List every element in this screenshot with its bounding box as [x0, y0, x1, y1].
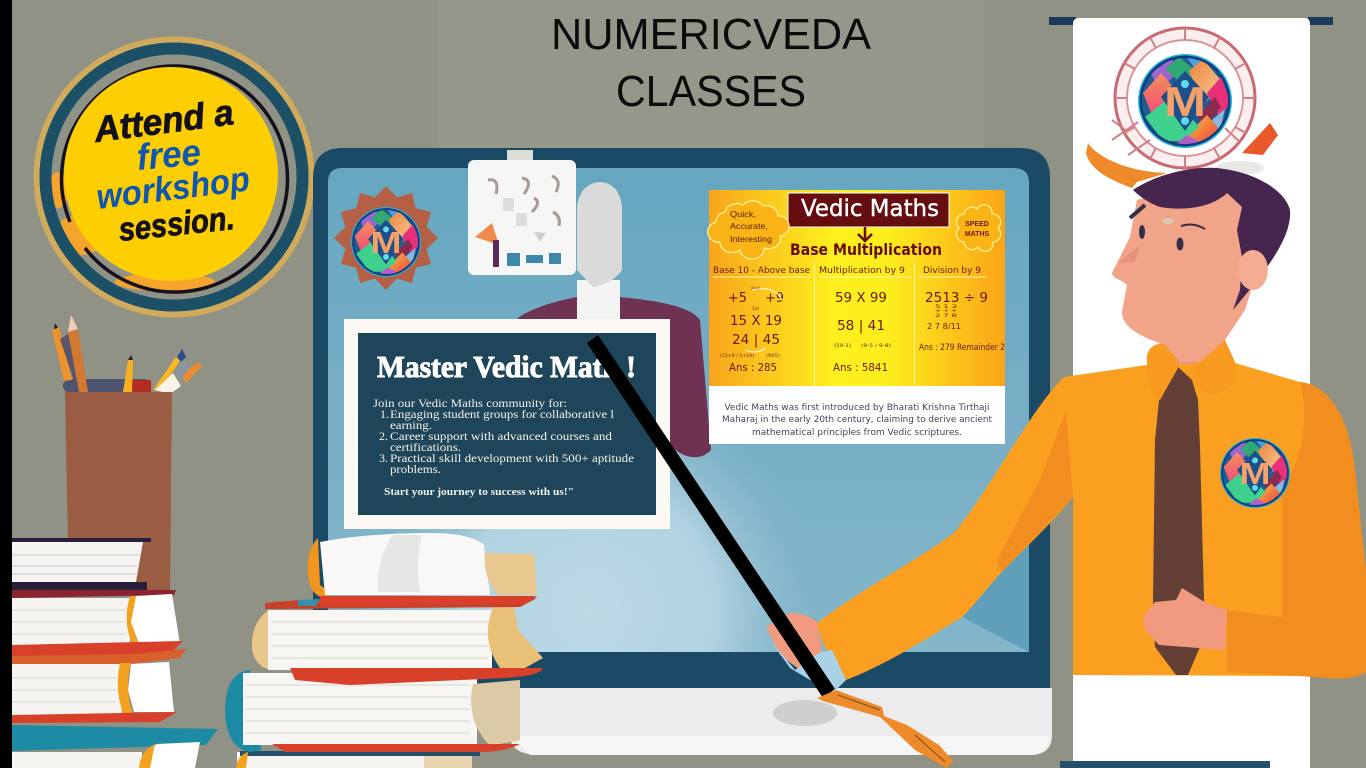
- card caption: Maharaj in the early 20th century, claiming to derive ancient: [722, 415, 992, 425]
- book 2: [252, 598, 543, 685]
- column 3 maths: 2 7 8/11: [927, 322, 961, 331]
- panel body text: 3.: [379, 451, 388, 465]
- icon: sketches: [488, 176, 559, 226]
- column 1 maths: 2nd: [751, 286, 760, 292]
- panel body text: earning.: [390, 418, 432, 432]
- panel heading: Master Vedic Math !: [377, 349, 636, 384]
- column 3 maths: [919, 291, 1005, 353]
- badge text: session: session.: [117, 199, 236, 248]
- badge text: workshop: workshop: [94, 159, 252, 217]
- card caption: [722, 403, 992, 438]
- column 2 maths: (9-5 / 9-8): [861, 343, 891, 349]
- column headers: [713, 266, 981, 276]
- icon: pencils: [52, 315, 202, 394]
- book 2: [12, 590, 183, 656]
- column 3 maths: 5 1 3: [935, 304, 957, 310]
- pointer tip: [817, 690, 954, 768]
- jacket logo badge: M: [1240, 456, 1270, 491]
- tie: [1153, 367, 1204, 675]
- card subtitle: Base Multiplication: [790, 240, 942, 259]
- monitor screen: [328, 168, 1029, 652]
- panel body text: Career support with advanced courses and: [390, 429, 612, 443]
- arrow: [858, 227, 872, 241]
- cloud: quick accurate interesting: Quick,: [730, 209, 756, 219]
- column 2 maths: 59 X 99: [835, 291, 887, 306]
- left hand and cuff: [766, 613, 822, 670]
- panel body text: Practical skill development with 500+ aptitude: [390, 451, 634, 465]
- free workshop badge: [36, 40, 312, 314]
- column dividers: [713, 262, 986, 386]
- panel body text: certifications.: [390, 440, 461, 454]
- bottom book: [236, 751, 480, 768]
- cloud: speed maths: [956, 205, 1001, 251]
- column 3 maths: 2513 ÷ 9: [925, 291, 988, 306]
- ear: [1238, 250, 1268, 290]
- pinned board with sketches: [468, 150, 576, 275]
- facial features: [1118, 205, 1205, 263]
- column 1 maths: (15+9 / 5+19): [720, 353, 754, 359]
- logo badge on brown star: M: [370, 225, 402, 260]
- column 2 maths: 58 | 41: [837, 319, 885, 334]
- monitor base: [510, 688, 1052, 755]
- badge text: free: free: [135, 132, 202, 178]
- cloud: quick accurate interesting: [708, 201, 789, 259]
- column 1 maths: (9X5): [766, 353, 780, 359]
- book 1: [12, 538, 151, 590]
- column headers: Multiplication by 9: [819, 266, 905, 276]
- column 3 maths: + + +: [935, 308, 957, 314]
- wall banner: [1049, 17, 1333, 768]
- zodiac ring: [1086, 28, 1278, 188]
- panel body text: 1.: [380, 407, 389, 421]
- column 2 maths: (59-1): [834, 343, 851, 349]
- book 3: [12, 649, 186, 723]
- panel body text: 2.: [379, 429, 388, 443]
- column 3 maths: 2 7 8: [935, 313, 957, 319]
- column 1 maths: +5: [728, 291, 747, 306]
- cloud: speed maths: MATHS: [965, 231, 990, 238]
- jacket shading: [1227, 382, 1366, 678]
- cloud: speed maths: SPEED: [965, 221, 989, 228]
- column headers: Division by 9: [923, 266, 981, 276]
- book 4: [12, 725, 218, 768]
- badge text: Attend a: Attend a: [91, 91, 236, 150]
- column headers: Base 10 - Above base: [713, 266, 810, 276]
- vedic maths card: [708, 190, 1005, 444]
- pencil cup: [52, 315, 202, 590]
- title: [551, 10, 872, 116]
- logo above head: [1086, 28, 1278, 188]
- presenter silhouette on screen: [517, 182, 711, 457]
- cloud: quick accurate interesting: Interesting: [730, 234, 772, 244]
- title: NUMERICVEDA: [551, 10, 872, 59]
- right hand: [1143, 588, 1227, 650]
- title: CLASSES: [616, 67, 806, 116]
- card caption: Vedic Maths was first introduced by Bharati Krishna Tirthaji: [724, 403, 990, 413]
- panel body text: Join our Vedic Maths community for:: [373, 396, 567, 410]
- panel closing line: Start your journey to success with us!": [384, 487, 574, 498]
- column 3 maths: Ans : 279 Remainder 2: [919, 343, 1005, 353]
- neck: [1170, 330, 1225, 375]
- column 1 maths: 15 X 19: [730, 314, 782, 329]
- cloud: quick accurate interesting: Accurate,: [730, 221, 768, 231]
- vedic maths card: Vedic Maths: [801, 196, 939, 222]
- panel body text: [373, 396, 634, 476]
- panel body text: problems.: [390, 462, 441, 476]
- hair: [1133, 168, 1290, 310]
- card title: [788, 193, 949, 227]
- book 3: [225, 670, 520, 752]
- logo M: M: [1164, 78, 1206, 125]
- column 2 maths: [833, 291, 891, 374]
- pointer stick: [587, 335, 954, 768]
- presenter: man: [766, 168, 1366, 690]
- face: [1112, 180, 1260, 362]
- column 1 maths: [720, 286, 784, 374]
- top book: [308, 533, 537, 606]
- logo badge on brown star: [334, 186, 438, 290]
- column 1 maths: +9: [765, 291, 784, 306]
- column 2 maths: Ans : 5841: [833, 361, 888, 374]
- centre book stack: [225, 533, 543, 768]
- left book stack: [12, 538, 218, 768]
- card caption: mathematical principles from Vedic scriptures.: [752, 428, 962, 438]
- jacket: [817, 363, 1366, 680]
- collar: [1147, 340, 1236, 400]
- monitor frame: [313, 148, 1050, 690]
- panel: master vedic math: [344, 319, 670, 529]
- column 1 maths: Ans : 285: [729, 361, 777, 374]
- column 1 maths: 1st: [752, 306, 759, 312]
- jacket logo badge: [1220, 438, 1290, 509]
- panel body text: Engaging student groups for collaborative l: [390, 407, 615, 421]
- column 1 maths: 24 | 45: [732, 333, 780, 348]
- monitor: [313, 148, 1052, 755]
